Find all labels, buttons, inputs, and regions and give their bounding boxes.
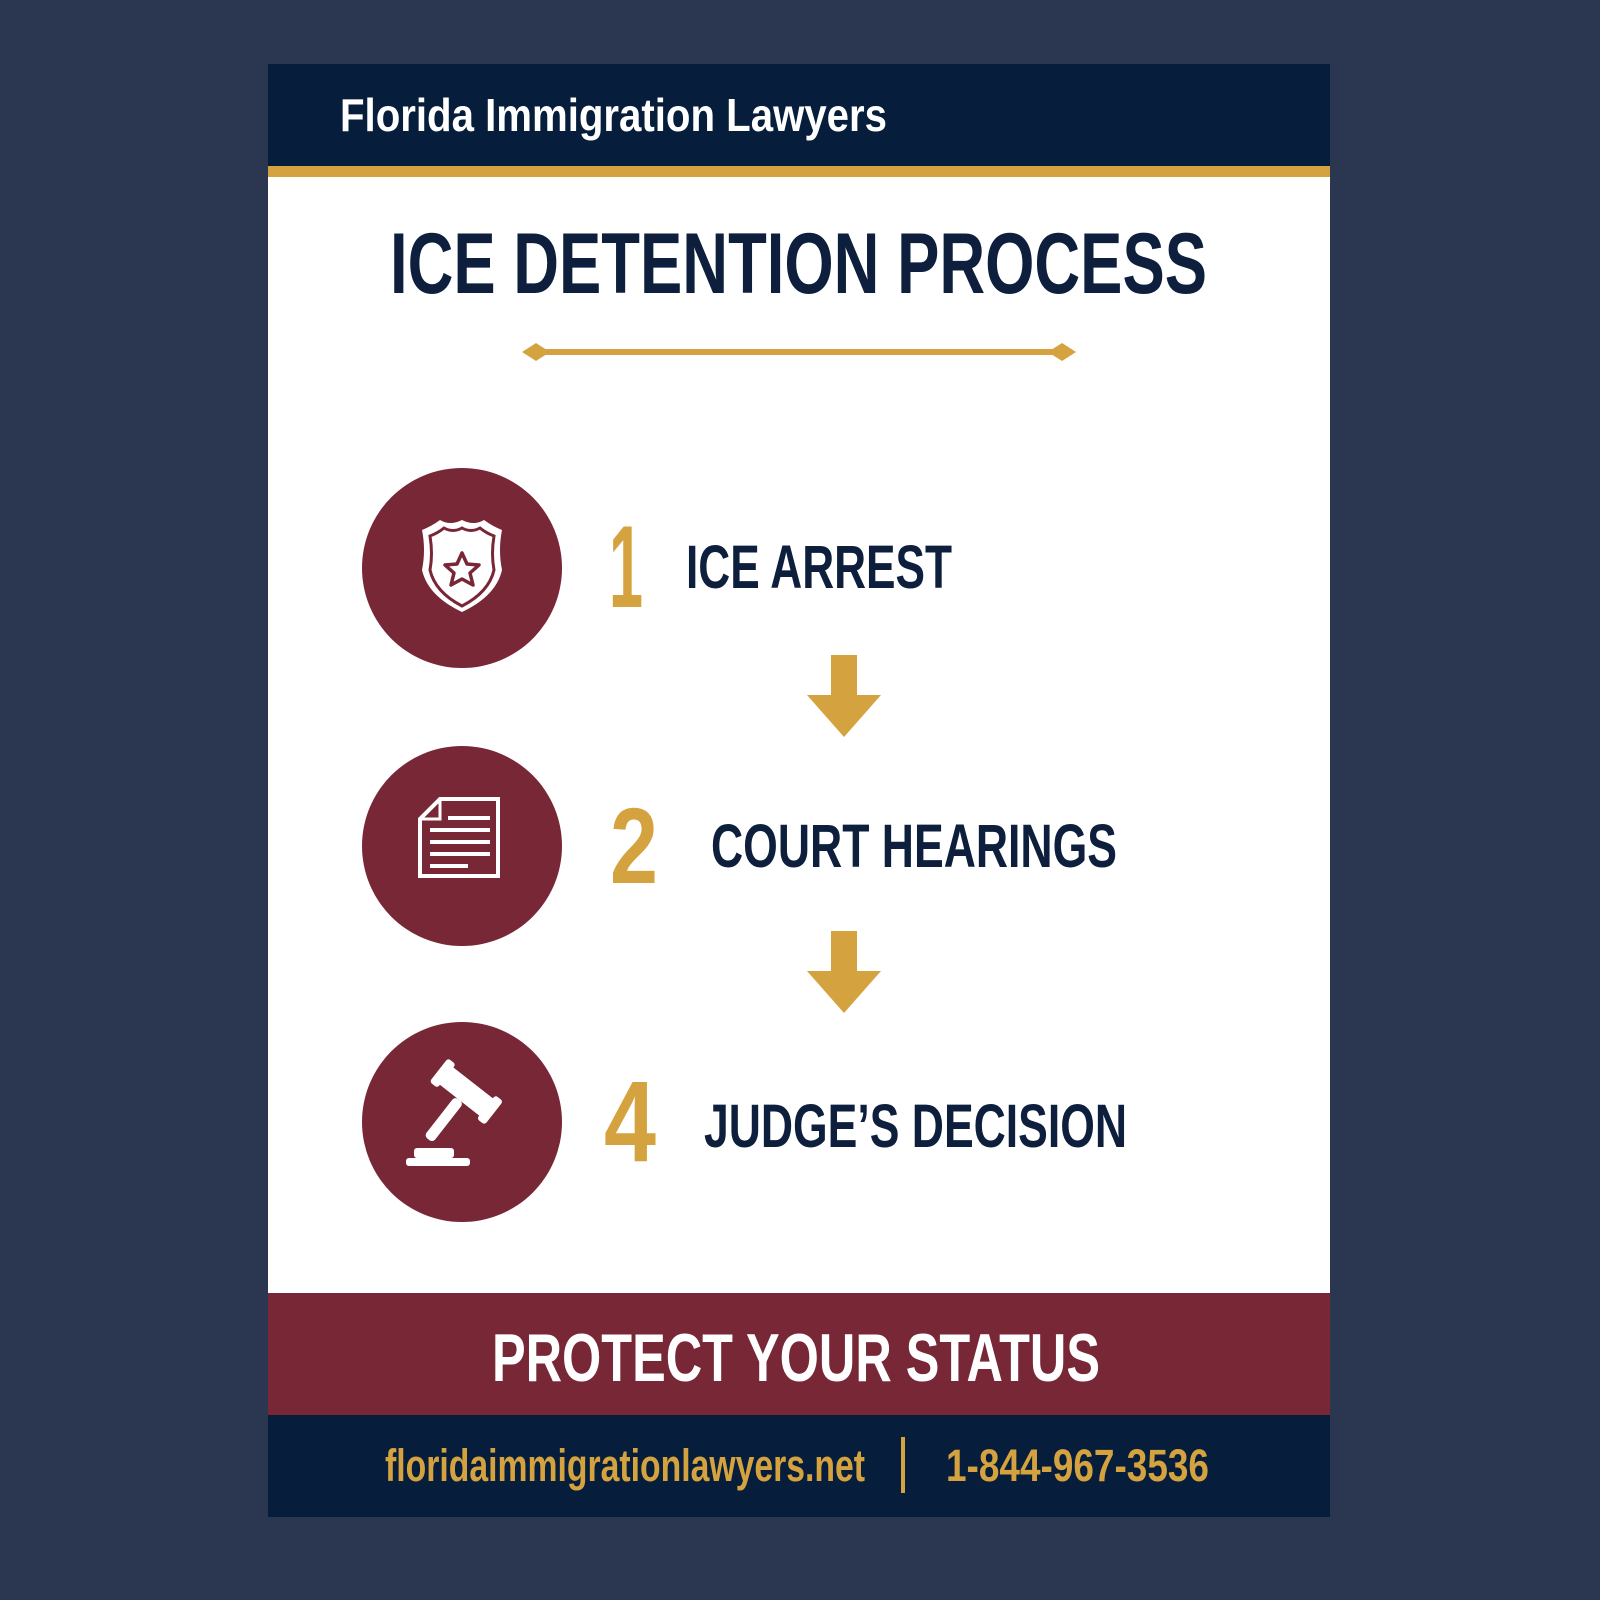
- label: COURT HEARINGS: [711, 812, 1117, 880]
- ornament divider: [522, 343, 1076, 361]
- footer: [268, 1415, 1330, 1517]
- icon: badge: [362, 468, 562, 668]
- header text: Florida Immigration Lawyers: [340, 89, 887, 141]
- icon: gavel: [362, 1022, 562, 1222]
- number 2: 2: [610, 785, 658, 906]
- banner: protect your status: PROTECT YOUR STATUS: [492, 1320, 1100, 1396]
- number 4: 4: [604, 1058, 656, 1186]
- card panel: [268, 64, 1330, 1517]
- arrow 1: [807, 655, 881, 737]
- label: ICE ARREST: [686, 533, 952, 601]
- step 3: [362, 1022, 1127, 1222]
- arrow 2: [807, 931, 881, 1013]
- step 1: [362, 468, 952, 668]
- title: ICE DETENTION PROCESS: [390, 216, 1207, 312]
- phone: 1-844-967-3536: [946, 1440, 1209, 1491]
- step 2: [362, 746, 1117, 946]
- label: JUDGE’S DECISION: [704, 1092, 1127, 1160]
- banner: protect your status: [268, 1293, 1330, 1415]
- header bar: [268, 64, 1330, 177]
- number 1: 1: [609, 501, 643, 632]
- website: floridaimmigrationlawyers.net: [385, 1440, 865, 1491]
- icon: document: [362, 746, 562, 946]
